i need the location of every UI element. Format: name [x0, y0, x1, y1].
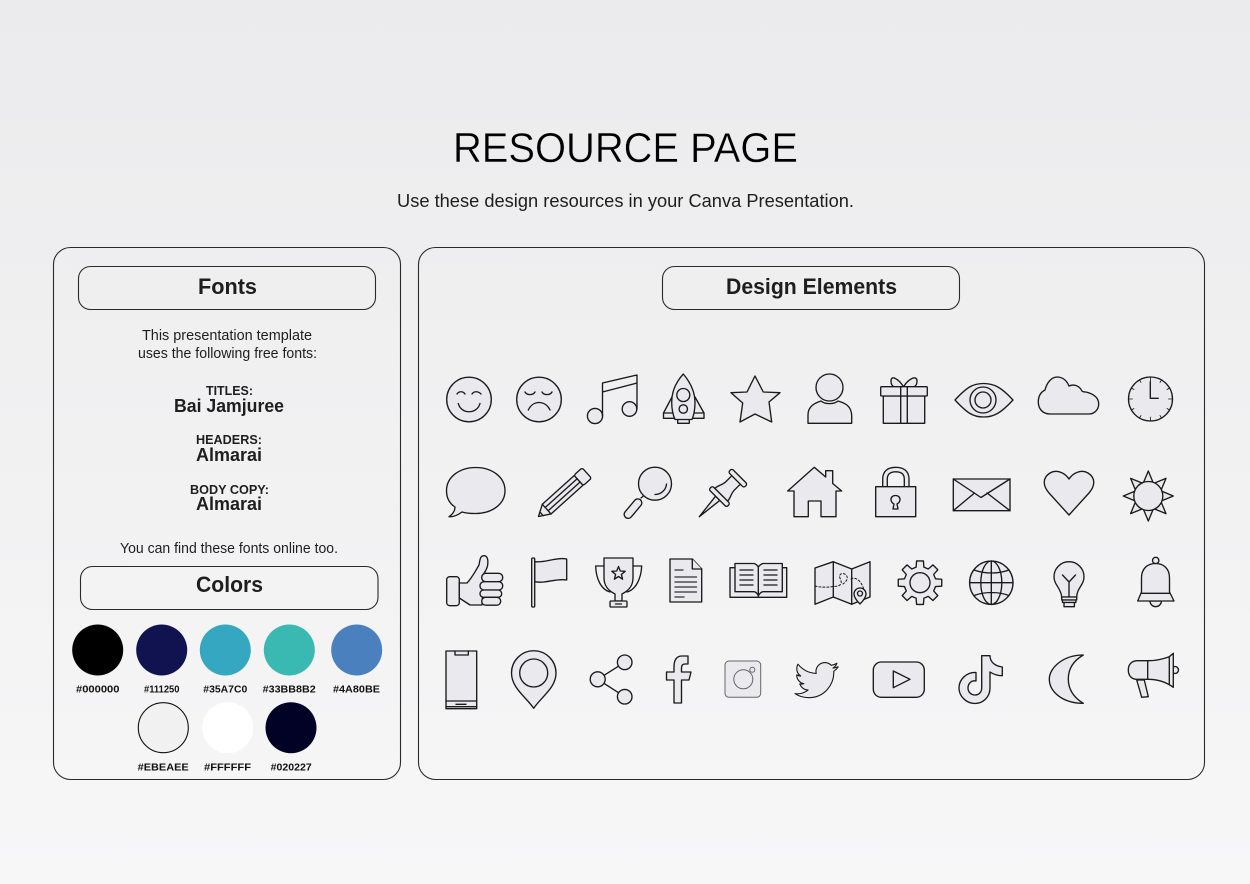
icon: megaphone	[1128, 653, 1178, 697]
icon: heart	[1044, 471, 1094, 515]
icon: document	[670, 559, 702, 602]
heading: colors: Colors	[196, 572, 263, 597]
text block: headers font: Almarai	[196, 444, 262, 465]
swatch: EBEAEE	[138, 703, 189, 774]
text block: font note: You can find these fonts online too.	[120, 541, 338, 557]
swatch: 111250: #111250	[144, 684, 180, 696]
swatch: 35A7C0	[200, 624, 251, 696]
swatch: 000000	[72, 624, 123, 696]
swatch: 33BB8B2: #33BB8B2	[263, 684, 316, 696]
icon: smiling face	[447, 377, 491, 422]
icon: twitter	[795, 663, 838, 698]
heading: colors	[80, 566, 378, 610]
panel: design elements	[418, 248, 1204, 780]
icon: rocket	[664, 374, 704, 423]
icon: padlock	[876, 467, 916, 517]
icon: globe	[970, 561, 1013, 604]
icon: speech bubble	[446, 468, 505, 517]
icon: star	[731, 376, 780, 422]
icon: sun	[1123, 471, 1173, 521]
text block: font intro: This presentation template	[142, 328, 312, 344]
icon: cloud	[1038, 377, 1099, 414]
swatch: 4A80BE	[331, 624, 382, 696]
icon: share	[590, 655, 632, 704]
icon: magnifying glass	[623, 467, 672, 520]
icon: gear	[898, 561, 942, 604]
heading: fonts	[78, 266, 376, 310]
subtitle: Use these design resources in your Canva Presentation.	[397, 190, 854, 211]
swatch: FFFFFF: #FFFFFF	[204, 762, 252, 774]
icon: clock	[1128, 377, 1172, 421]
icon: bell	[1138, 557, 1174, 607]
swatch: 4A80BE: #4A80BE	[333, 684, 380, 696]
swatch: 35A7C0: #35A7C0	[203, 684, 247, 696]
text block: body copy font	[190, 483, 269, 514]
icon: envelope	[953, 479, 1010, 511]
swatch: 020227	[266, 702, 316, 774]
text block: font intro	[138, 328, 317, 362]
text block: titles font: TITLES:	[206, 384, 253, 398]
icon: thumbs up	[447, 556, 503, 606]
text block: body copy font: BODY COPY:	[190, 483, 269, 497]
icon: crescent moon	[1049, 655, 1083, 703]
icon: person	[808, 374, 852, 423]
icon: map pin	[512, 651, 556, 708]
text block: font intro: uses the following free fonts:	[138, 346, 317, 362]
text block: titles font	[174, 384, 284, 416]
title: RESOURCE PAGE	[453, 124, 798, 171]
swatch: 111250	[136, 624, 187, 696]
swatch: EBEAEE: #EBEAEE	[138, 762, 189, 774]
text block: headers font: HEADERS:	[196, 433, 262, 447]
icon: tiktok	[959, 656, 1002, 704]
heading: fonts: Fonts	[198, 274, 257, 299]
icon: gift box	[881, 378, 927, 423]
icon: sad face	[517, 377, 561, 422]
icon: flag	[532, 558, 567, 607]
text block: headers font	[196, 433, 262, 465]
text block: body copy font: Almarai	[196, 493, 262, 514]
icon: instagram	[725, 661, 761, 697]
text block: titles font: Bai Jamjuree	[174, 395, 284, 416]
swatch: FFFFFF	[202, 702, 253, 774]
icon: push pin	[690, 468, 748, 526]
swatch: 000000: #000000	[76, 684, 120, 696]
icon: open book	[730, 564, 787, 597]
icon: facebook	[666, 656, 691, 703]
heading: design elements	[662, 266, 960, 310]
icon: pencil	[534, 468, 591, 522]
icon: trophy	[596, 558, 642, 607]
icon: folded map	[815, 562, 870, 604]
icon: smartphone	[446, 651, 477, 709]
icon: video play	[873, 662, 924, 697]
swatch: 020227: #020227	[271, 762, 312, 774]
icon: eye	[955, 384, 1013, 417]
panel: fonts and colors	[54, 248, 400, 780]
icon: house	[788, 467, 842, 517]
swatch: 33BB8B2	[263, 624, 316, 696]
icon: music notes	[587, 375, 637, 424]
icon: light bulb	[1054, 562, 1084, 607]
heading: design elements: Design Elements	[726, 274, 897, 299]
